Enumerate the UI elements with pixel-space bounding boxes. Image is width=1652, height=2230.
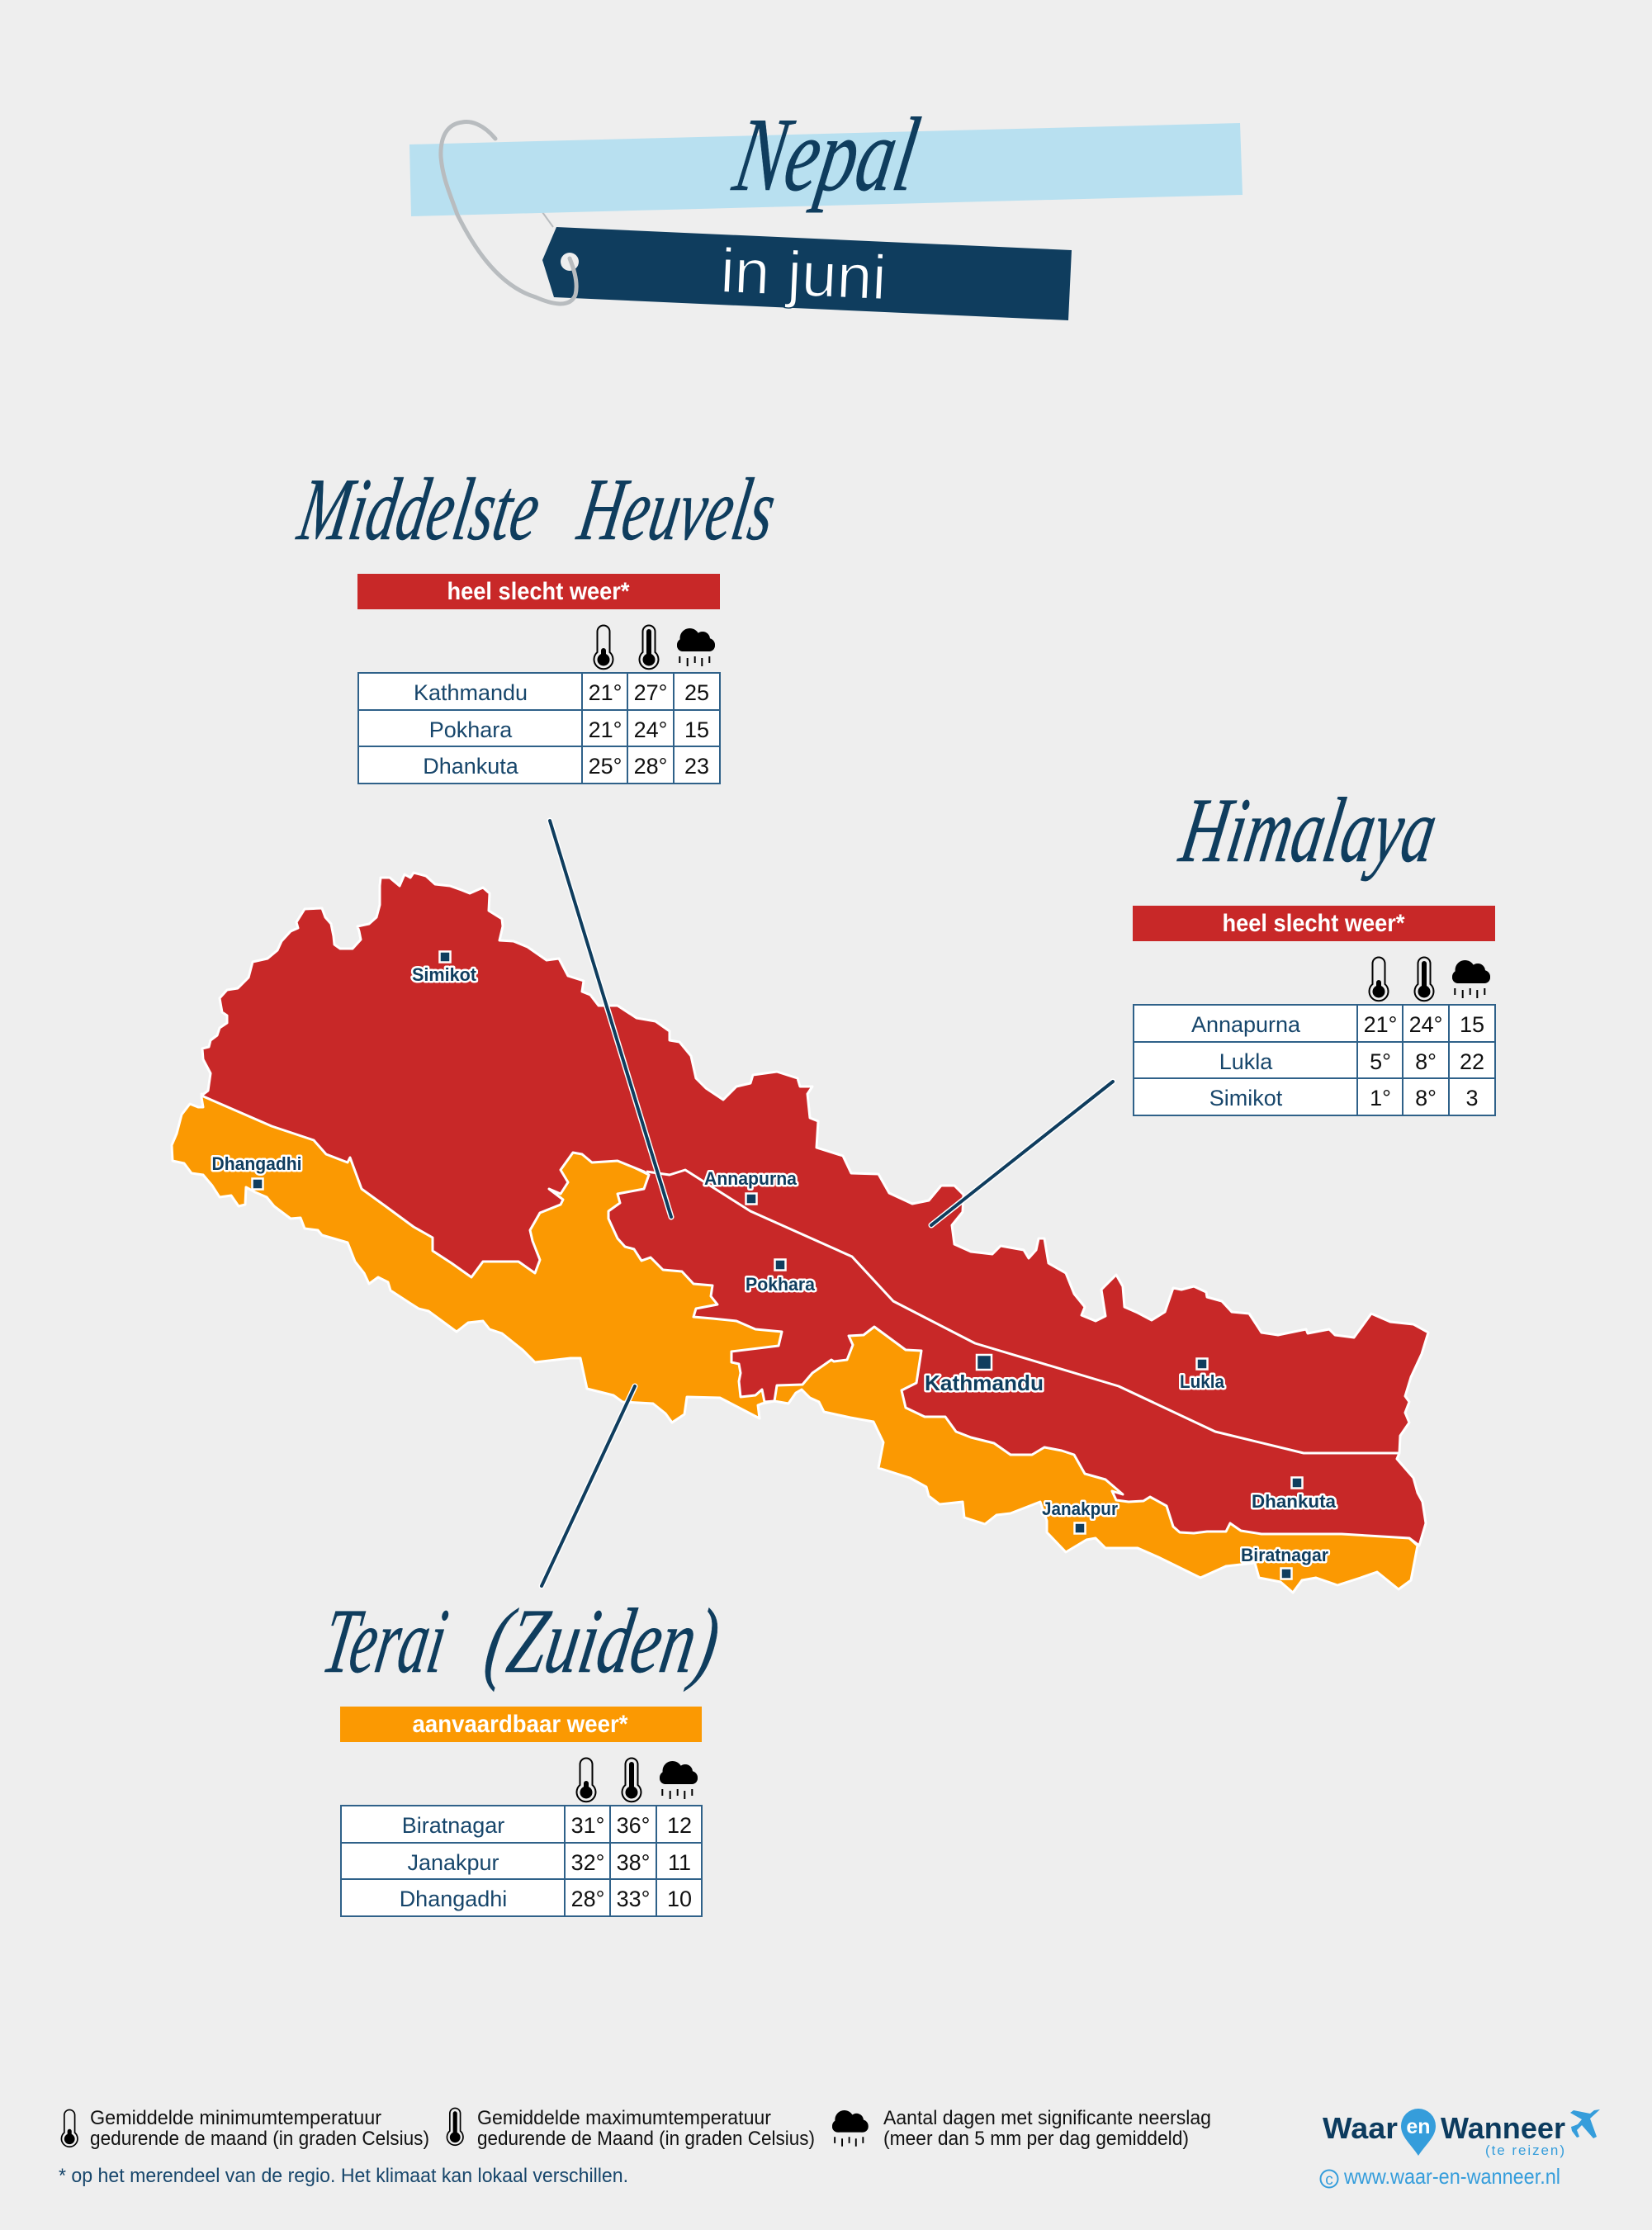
table: 1° (1370, 1086, 1391, 1110)
table (358, 673, 720, 784)
heading: Terai (Zuiden): (Zuiden) (479, 1590, 727, 1693)
table: 28° (634, 754, 667, 779)
table (341, 1806, 702, 1916)
table: 10 (667, 1887, 692, 1911)
heading: Middelste Heuvels: Heuvels (570, 460, 783, 559)
rating bar (1133, 906, 1495, 941)
table: Dhangadhi (400, 1887, 507, 1911)
table: 15 (684, 717, 709, 742)
heading: Terai (Zuiden) (316, 1590, 727, 1693)
icon: maximum temperature (447, 2108, 463, 2145)
rating bar: aanvaardbaar weer* (413, 1711, 628, 1738)
footnote: * op het merendeel van de regio. Het klimaat kan lokaal verschillen. (59, 2165, 628, 2187)
table: 21° (1364, 1012, 1397, 1037)
logo: Waar en Wanneer: (te reizen) (1485, 2142, 1564, 2158)
city: Janakpur (1042, 1499, 1118, 1534)
Himalaya boundary line (646, 1170, 1399, 1453)
legend text: minimum temperature: Gemiddelde minimumtemperatuur (90, 2107, 381, 2129)
table: Simikot (1209, 1086, 1283, 1110)
table: 5° (1370, 1049, 1391, 1074)
table: 28° (571, 1887, 604, 1911)
legend text: maximum temperature: gedurende de Maand (in graden Celsius) (477, 2128, 815, 2150)
icon: maximum temperature (622, 1759, 641, 1802)
legend text: maximum temperature: Gemiddelde maximumtemperatuur (477, 2107, 771, 2129)
title banner (409, 96, 1243, 320)
table: 31° (571, 1813, 604, 1838)
city: Dhangadhi (211, 1153, 302, 1189)
table: 24° (1409, 1012, 1442, 1037)
leader line: Middelste Heuvels (550, 821, 671, 1217)
table: Kathmandu (414, 680, 528, 705)
panel: Himalaya (1133, 779, 1495, 1115)
icon: minimum temperature (61, 2109, 78, 2147)
table: 21° (589, 717, 622, 742)
subtitle: in juni: in juni (719, 236, 888, 314)
rating bar (340, 1707, 702, 1742)
city: Biratnagar (1241, 1545, 1328, 1579)
logo: Waar en Wanneer: Wanneer (1441, 2111, 1565, 2145)
city: Janakpur: Janakpur (1042, 1499, 1118, 1519)
legend text: precipitation: Aantal dagen met significante neerslag (883, 2107, 1211, 2129)
city: Lukla: Lukla (1180, 1371, 1225, 1392)
table: 32° (571, 1850, 604, 1875)
legend text: precipitation (883, 2107, 1211, 2150)
icon: rain cloud (677, 628, 715, 666)
table: 23 (684, 754, 709, 779)
city: Annapurna: Annapurna (704, 1168, 798, 1189)
city: Pokhara: Pokhara (746, 1274, 816, 1295)
table: 8° (1415, 1049, 1437, 1074)
city: Simikot: Simikot (412, 964, 477, 985)
table: 8° (1415, 1086, 1437, 1110)
icon: rain cloud (832, 2110, 869, 2147)
table: 33° (617, 1887, 650, 1911)
table: 24° (634, 717, 667, 742)
logo: Waar en Wanneer: Waar (1323, 2111, 1398, 2145)
table: 27° (634, 680, 667, 705)
leader line: Himalaya (931, 1082, 1113, 1225)
city: Kathmandu: Kathmandu (925, 1371, 1044, 1395)
icon: rain cloud (660, 1761, 698, 1799)
table: Lukla (1219, 1049, 1273, 1074)
logo: Waar en Wanneer: en (1406, 2115, 1431, 2138)
table: Annapurna (1191, 1012, 1301, 1037)
table: Janakpur (407, 1850, 499, 1875)
region: Himalaya and Middelste Heuvels (201, 873, 1428, 1546)
rating bar (357, 574, 720, 609)
city: Simikot (412, 951, 477, 985)
table: 21° (589, 680, 622, 705)
city: Dhangadhi: Dhangadhi (211, 1153, 302, 1174)
table: Pokhara (429, 717, 513, 742)
rating bar: heel slecht weer* (447, 578, 630, 605)
heading: Terai (Zuiden): Terai (316, 1590, 454, 1693)
panel: Terai (Zuiden) (316, 1590, 727, 1916)
logo: Waar en Wanneer (1323, 2109, 1600, 2158)
tag ring (441, 122, 576, 304)
table: 25° (589, 754, 622, 779)
icon: maximum temperature (639, 626, 659, 669)
icon: minimum temperature (594, 626, 613, 669)
city: Biratnagar: Biratnagar (1241, 1545, 1328, 1565)
icon: minimum temperature (1369, 958, 1389, 1001)
icon: minimum temperature (576, 1759, 596, 1802)
icon: map pin (1401, 2109, 1436, 2156)
website link: c (1325, 2171, 1333, 2189)
website link: www.waar-en-wanneer.nl (1343, 2164, 1560, 2189)
city: Annapurna (704, 1168, 798, 1204)
heading: Nepal: Nepal (726, 96, 927, 213)
table: 25 (684, 680, 709, 705)
icon: maximum temperature (1415, 958, 1433, 1001)
table: Biratnagar (402, 1813, 504, 1838)
legend (61, 2107, 1211, 2150)
icon: rain cloud (1452, 960, 1490, 998)
leader line: Terai (542, 1386, 635, 1586)
panel: Middelste Heuvels (291, 460, 783, 784)
region: Terai (172, 1094, 1418, 1593)
tag hole (561, 253, 579, 271)
table (1134, 1005, 1495, 1115)
table: 11 (668, 1850, 691, 1875)
icon: airplane (1570, 2109, 1600, 2138)
city: Lukla (1180, 1359, 1225, 1392)
table: 38° (617, 1850, 650, 1875)
table: 3 (1465, 1086, 1479, 1110)
legend text: precipitation: (meer dan 5 mm per dag gemiddeld) (883, 2128, 1189, 2150)
legend text: minimum temperature (90, 2107, 429, 2150)
map of Nepal (172, 821, 1428, 1593)
table: 36° (617, 1813, 650, 1838)
legend text: minimum temperature: gedurende de maand (in graden Celsius) (90, 2128, 429, 2150)
city: Pokhara (746, 1260, 816, 1295)
table: 15 (1460, 1012, 1484, 1037)
heading: Middelste Heuvels: Middelste (291, 460, 547, 559)
table: 12 (667, 1813, 692, 1838)
city: Dhankuta (1252, 1478, 1337, 1512)
rating bar: heel slecht weer* (1222, 910, 1405, 937)
legend text: maximum temperature (477, 2107, 815, 2150)
light blue title strip (409, 123, 1243, 216)
city: Kathmandu (925, 1355, 1044, 1395)
navy tag (542, 227, 1072, 320)
heading: Himalaya: Himalaya (1172, 779, 1444, 882)
city: Dhankuta: Dhankuta (1252, 1491, 1337, 1512)
table: Dhankuta (423, 754, 519, 779)
table: 22 (1460, 1049, 1484, 1074)
